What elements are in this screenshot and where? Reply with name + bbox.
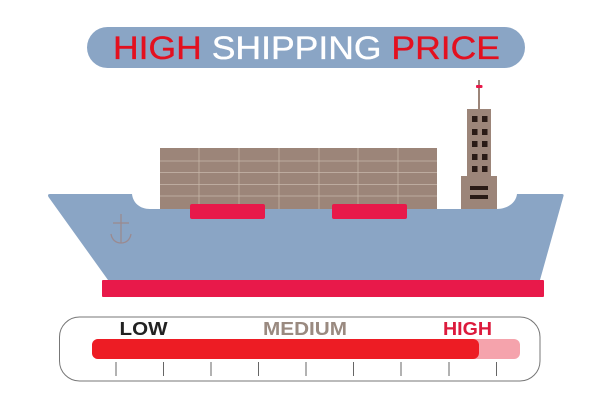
hull xyxy=(48,194,564,280)
gauge fill xyxy=(92,339,479,359)
icon: anchor xyxy=(111,214,131,243)
ship xyxy=(48,80,564,297)
deck red bar left xyxy=(190,204,265,219)
title text: HIGH SHIPPING PRICE xyxy=(113,30,500,66)
label: high: HIGH xyxy=(443,318,492,339)
title banner xyxy=(87,27,525,68)
deck red bar right xyxy=(332,204,407,219)
containers xyxy=(160,148,437,209)
gauge ticks xyxy=(116,362,496,376)
label: low: LOW xyxy=(120,318,168,339)
keel red bar xyxy=(102,280,544,297)
gauge track xyxy=(92,339,520,359)
price gauge xyxy=(60,317,540,381)
label: medium: MEDIUM xyxy=(263,318,347,339)
bridge tower xyxy=(461,80,497,209)
